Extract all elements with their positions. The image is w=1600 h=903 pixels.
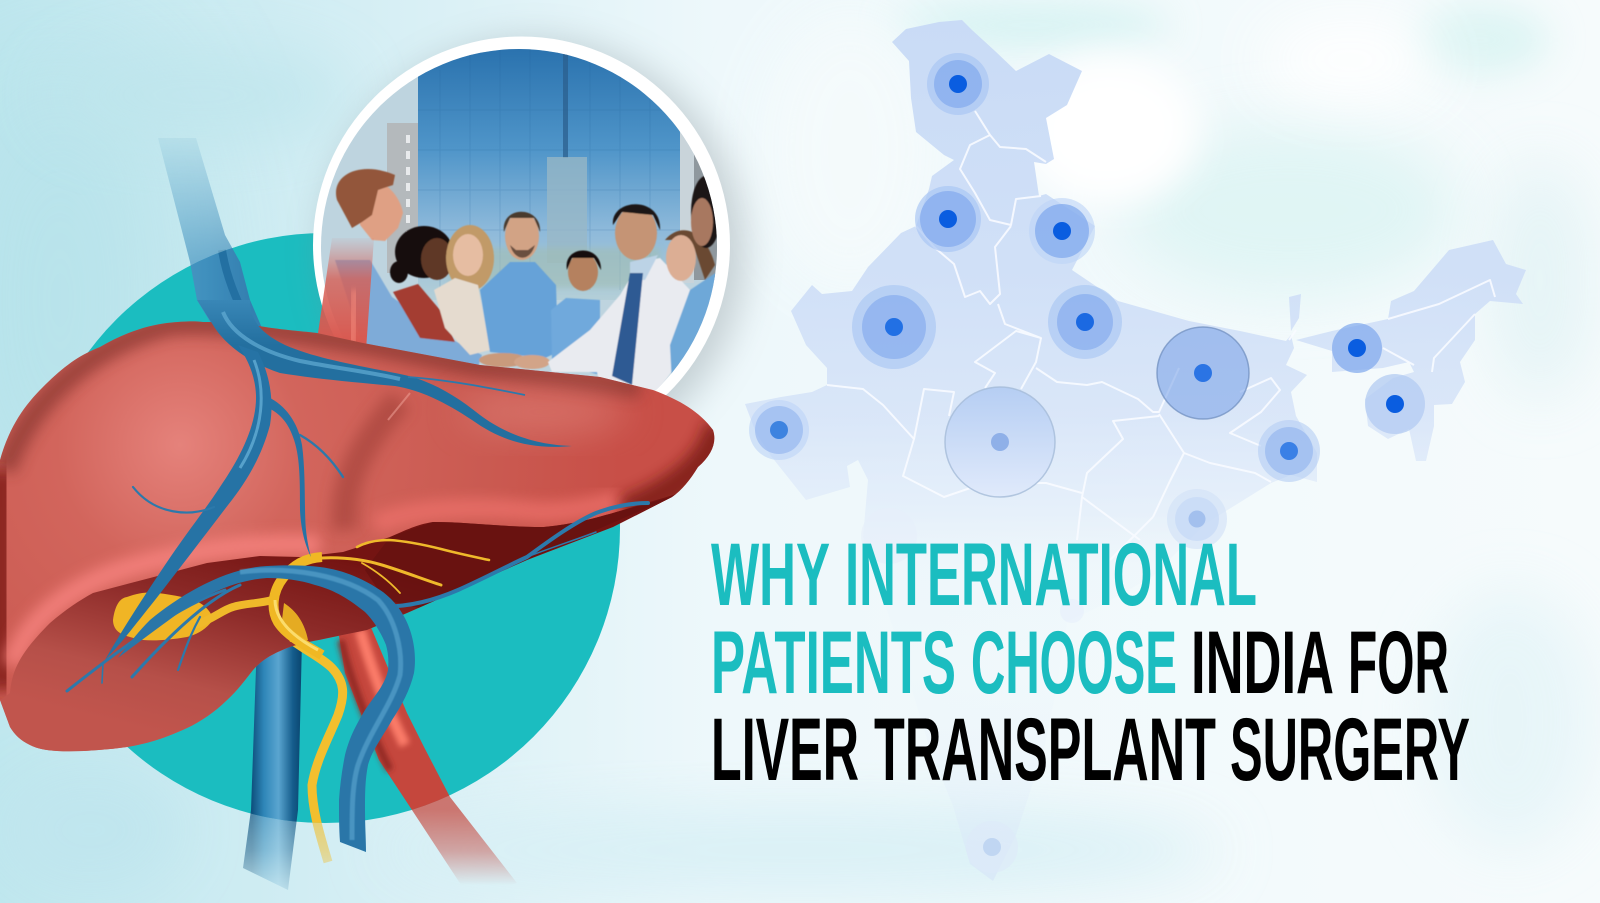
right dark underside xyxy=(365,497,672,608)
dark tip of liver xyxy=(625,425,720,512)
lower aorta xyxy=(338,625,517,897)
photo: medical team in front of hospital xyxy=(321,49,717,391)
thin upper branch xyxy=(408,377,525,395)
trees xyxy=(450,248,660,288)
bubble: West Bengal xyxy=(1258,420,1320,482)
handshake xyxy=(479,353,550,369)
bubble: Madhya Pradesh xyxy=(945,387,1055,497)
man in blue scrubs xyxy=(480,212,558,358)
doctor in white coat xyxy=(548,204,690,392)
title line 1: WHY xyxy=(711,524,830,624)
map land xyxy=(745,20,1526,881)
title line 2 black: FOR xyxy=(1348,612,1449,712)
bubble: Tamil Nadu xyxy=(966,821,1018,873)
lower bile duct xyxy=(292,640,343,862)
title line 2 teal: CHOOSE xyxy=(971,612,1177,712)
photo shadow xyxy=(322,40,746,464)
portal vein trunk highlight xyxy=(223,312,400,379)
top edge shade xyxy=(5,324,640,470)
bubble: Odisha xyxy=(1167,489,1227,549)
bubble: Gujarat xyxy=(749,400,809,460)
liver underside xyxy=(0,494,676,752)
bubble: Jammu and Kashmir xyxy=(927,53,989,115)
right building xyxy=(680,133,719,283)
bubble: Uttar Pradesh xyxy=(1048,285,1122,359)
upper vena cava fading tube xyxy=(158,138,262,330)
nurse three xyxy=(691,176,721,248)
state borders xyxy=(827,111,1495,560)
title line 1: INTERNATIONAL xyxy=(845,524,1257,624)
sky xyxy=(321,49,717,390)
portal vein trunk xyxy=(197,300,572,447)
title xyxy=(711,524,1470,799)
left main branch xyxy=(105,345,272,660)
hospital tower xyxy=(418,48,680,300)
upper right lobe glow xyxy=(460,390,630,434)
side branch xyxy=(268,397,311,557)
title line 3: TRANSPLANT xyxy=(874,699,1216,799)
portal vein highlight xyxy=(240,570,401,840)
side building xyxy=(387,123,418,273)
title line 2 teal: PATIENTS xyxy=(711,612,956,712)
upper aorta overlay on photo xyxy=(317,238,374,350)
left edge shade xyxy=(0,470,4,690)
man in blue shirt xyxy=(335,169,482,367)
bile duct branches xyxy=(322,540,489,593)
main bile duct xyxy=(274,557,322,655)
title line 2 black: INDIA xyxy=(1191,612,1334,712)
blonde woman xyxy=(434,225,494,355)
left lobe lower rim highlight xyxy=(12,544,320,665)
bubble: Mizoram xyxy=(1365,374,1425,434)
tower window grid xyxy=(418,48,680,290)
liver body xyxy=(0,321,714,751)
lobe fissure shade xyxy=(344,400,400,530)
bubble: Telangana xyxy=(1060,599,1084,623)
cystic duct xyxy=(195,600,272,625)
teal circle xyxy=(30,233,620,823)
bubble: Maharashtra xyxy=(861,508,917,564)
woman in red dress xyxy=(390,226,455,342)
title line 3: LIVER xyxy=(711,699,859,799)
bubble: Bihar xyxy=(1157,327,1249,419)
liver xyxy=(0,300,720,852)
tower reflection xyxy=(547,48,587,263)
fissure highlight line xyxy=(388,393,410,420)
small branches xyxy=(67,435,648,691)
bubble: Rajasthan xyxy=(852,285,936,369)
main portal vein xyxy=(118,565,415,852)
gallbladder xyxy=(113,592,213,640)
bile duct highlight xyxy=(275,600,318,650)
right lobe lower rim highlight xyxy=(375,500,620,525)
second duct stub xyxy=(282,603,308,642)
nurse two xyxy=(664,229,716,374)
bubble: Delhi xyxy=(915,186,981,252)
India map xyxy=(745,20,1526,881)
photo ring xyxy=(313,36,730,454)
left branch highlight xyxy=(240,360,261,468)
lower vena cava xyxy=(243,640,302,890)
nurse in blue scrubs xyxy=(551,250,601,375)
title line 1 xyxy=(711,524,1257,624)
bubble: Assam xyxy=(1332,323,1382,373)
bubble: Uttarakhand xyxy=(1029,198,1095,264)
